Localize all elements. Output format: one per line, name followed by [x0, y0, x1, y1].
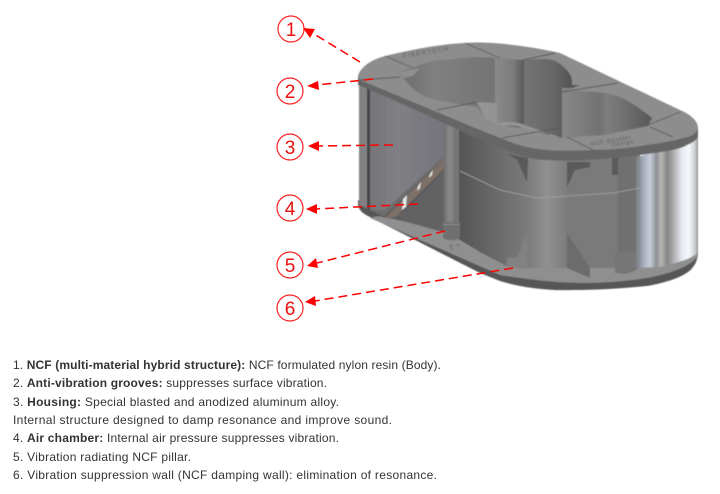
embossed label second line: Design: [611, 139, 634, 149]
air chamber surface: [385, 130, 480, 262]
legend item 6: 6. Vibration suppression wall (NCF damping wall): elimination of resonance.: [13, 468, 437, 482]
top lip: [358, 76, 698, 161]
aluminium outer shell: [636, 134, 698, 268]
embossed label: NCF Booster: [590, 135, 632, 148]
callout 4: [277, 195, 418, 221]
chamber cylinder: [458, 130, 528, 268]
screw holes: [450, 244, 459, 250]
callout 3: 3: [285, 138, 295, 159]
callout 3: [277, 134, 393, 160]
base lip: [358, 200, 698, 290]
housing ribbed panel: [370, 87, 473, 210]
legend item 3 continued: Internal structure designed to damp resonance and improve sound.: [13, 413, 392, 427]
upper fins: [507, 154, 590, 187]
pillar 5: [443, 125, 460, 240]
seam line: [460, 171, 640, 198]
interior back wall: [359, 85, 640, 268]
right pillar shaft: [618, 150, 636, 255]
callout 4: 4: [285, 199, 296, 220]
housing left edge: [359, 82, 367, 208]
legend item 5: 5. Vibration radiating NCF pillar.: [13, 450, 191, 464]
peanut cavities: [403, 57, 652, 138]
legend item 1: 1. NCF (multi-material hybrid structure): NCF formulated nylon resin (Body).: [13, 358, 441, 372]
callout 5: [277, 231, 445, 278]
callout 6: [277, 268, 513, 321]
inner floor: [370, 216, 698, 283]
callout 5: 5: [285, 256, 295, 277]
legend item 3: 3. Housing: Special blasted and anodized aluminum alloy.: [13, 395, 339, 409]
legend item 2: 2. Anti-vibration grooves: suppresses surface vibration.: [13, 376, 327, 390]
central column: [528, 150, 566, 268]
legend text: [13, 358, 441, 482]
callout 6: 6: [285, 299, 295, 320]
anti-vibration grooves: [360, 43, 680, 151]
top surface: [358, 43, 698, 151]
callout 1: 1: [286, 20, 296, 41]
legend item 4: 4. Air chamber: Internal air pressure suppresses vibration.: [13, 431, 339, 445]
lower fins: [507, 232, 527, 269]
diagonal bracing with cutouts: [385, 134, 471, 218]
callout 1: [278, 16, 360, 62]
embossed logo: FIBERTECH: [402, 46, 450, 60]
flat wall panel: [566, 155, 640, 268]
icon: 3D cutaway of guitar body structure: [358, 43, 698, 290]
callout 2: [277, 78, 373, 104]
callout 2: 2: [285, 82, 295, 103]
right pillar base: [615, 251, 637, 274]
